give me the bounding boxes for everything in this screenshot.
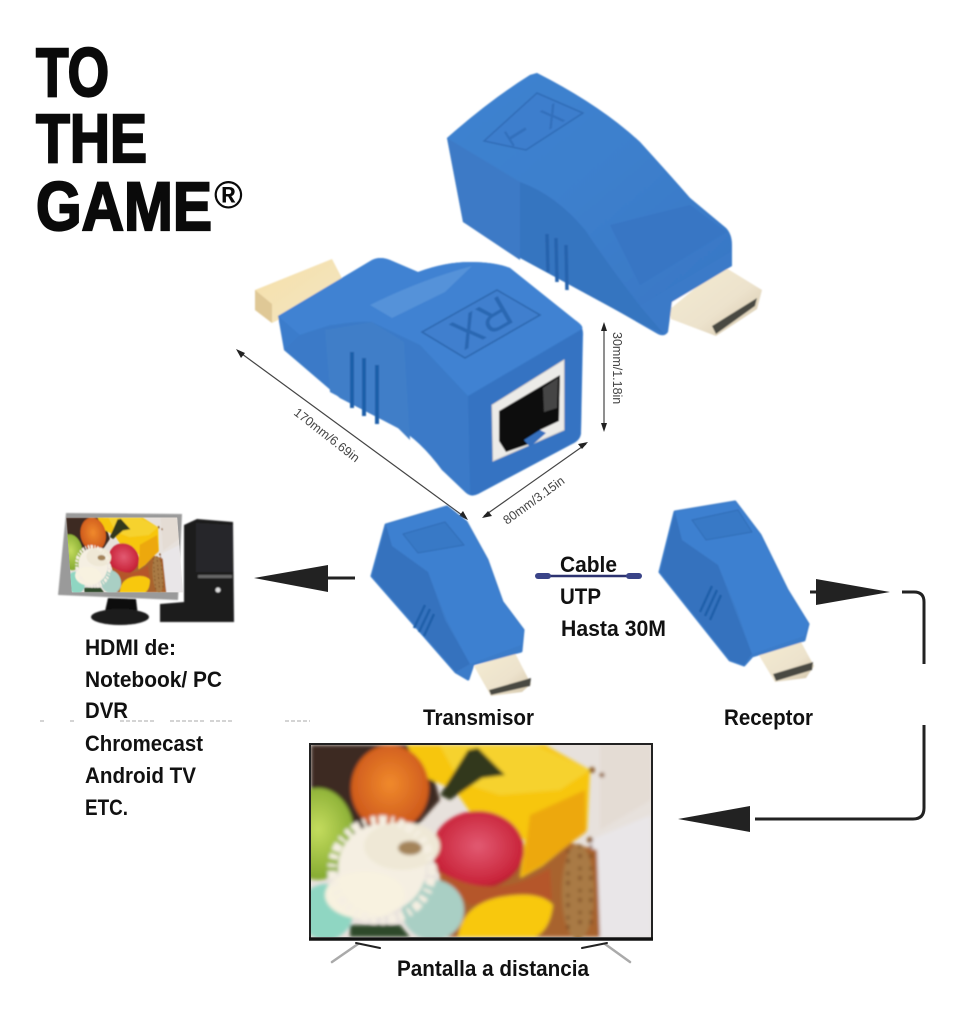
embossed RX plate [422, 286, 540, 359]
product: TX connector (top) [447, 73, 762, 336]
TV with photo [282, 744, 653, 962]
arrow: cable into receiver [810, 579, 924, 664]
arrow: source line to TV [678, 725, 924, 832]
label: Pantalla a distancia: Pantalla a distancia [397, 956, 590, 981]
cable icon [535, 573, 642, 579]
cable label: Hasta 30M [561, 616, 666, 641]
cable label [560, 552, 666, 641]
cable label: UTP [560, 584, 601, 609]
label: Transmisor: Transmisor [423, 705, 534, 730]
embossed TX plate: T [499, 117, 537, 150]
dimension: height 30mm: 30mm/1.18in [610, 332, 624, 404]
HDMI plug [474, 653, 531, 696]
dimension: width 80mm [482, 442, 588, 527]
logo: TO THE GAME: GAME [36, 168, 212, 245]
PC tower [160, 519, 234, 622]
RJ45 port [492, 360, 564, 461]
label: Receptor: Receptor [724, 705, 813, 730]
list: HDMI sources: Android TV [85, 763, 196, 788]
TX plate [403, 522, 464, 553]
monitor [58, 513, 182, 625]
logo: TO THE GAME: THE [36, 100, 147, 177]
list: HDMI sources: ETC. [85, 795, 128, 820]
HDMI plug [667, 263, 762, 336]
list: HDMI sources: DVR [85, 698, 128, 723]
product: RX connector (front) [255, 258, 583, 496]
icon: desktop PC with monitor [57, 513, 234, 625]
dimension: height 30mm [601, 322, 624, 432]
vent ribs [414, 605, 434, 636]
transmitter connector [372, 507, 531, 696]
RX plate [692, 510, 752, 540]
embossed TX plate [484, 93, 583, 150]
monitor screen [57, 518, 183, 594]
receiver connector [660, 502, 814, 682]
list: HDMI sources: Notebook/ PC [85, 667, 222, 692]
dimension: length 170mm [236, 349, 468, 520]
TV legs [332, 943, 630, 962]
HDMI plug [255, 259, 346, 323]
logo: TO THE GAME: ® [214, 174, 243, 217]
embossed TX plate: X [536, 98, 569, 136]
list: HDMI sources: Chromecast [85, 731, 204, 756]
logo: TO THE GAME: TO [36, 34, 109, 111]
vent ribs [547, 234, 567, 290]
vent ribs [352, 352, 377, 424]
embossed RX plate: RX [443, 286, 520, 359]
TV screen [282, 745, 651, 940]
vent ribs [700, 586, 721, 620]
list: HDMI sources [85, 635, 222, 820]
arrow: transmitter to PC [254, 565, 355, 592]
dimension: width 80mm: 80mm/3.15in [501, 474, 567, 527]
cable label: Cable [560, 552, 617, 577]
TV frame [310, 744, 652, 939]
dimension: length 170mm: 170mm/6.69in [291, 405, 362, 465]
HDMI plug [757, 642, 814, 682]
logo: TO THE GAME [36, 34, 243, 245]
list: HDMI sources: HDMI de: [85, 635, 176, 660]
